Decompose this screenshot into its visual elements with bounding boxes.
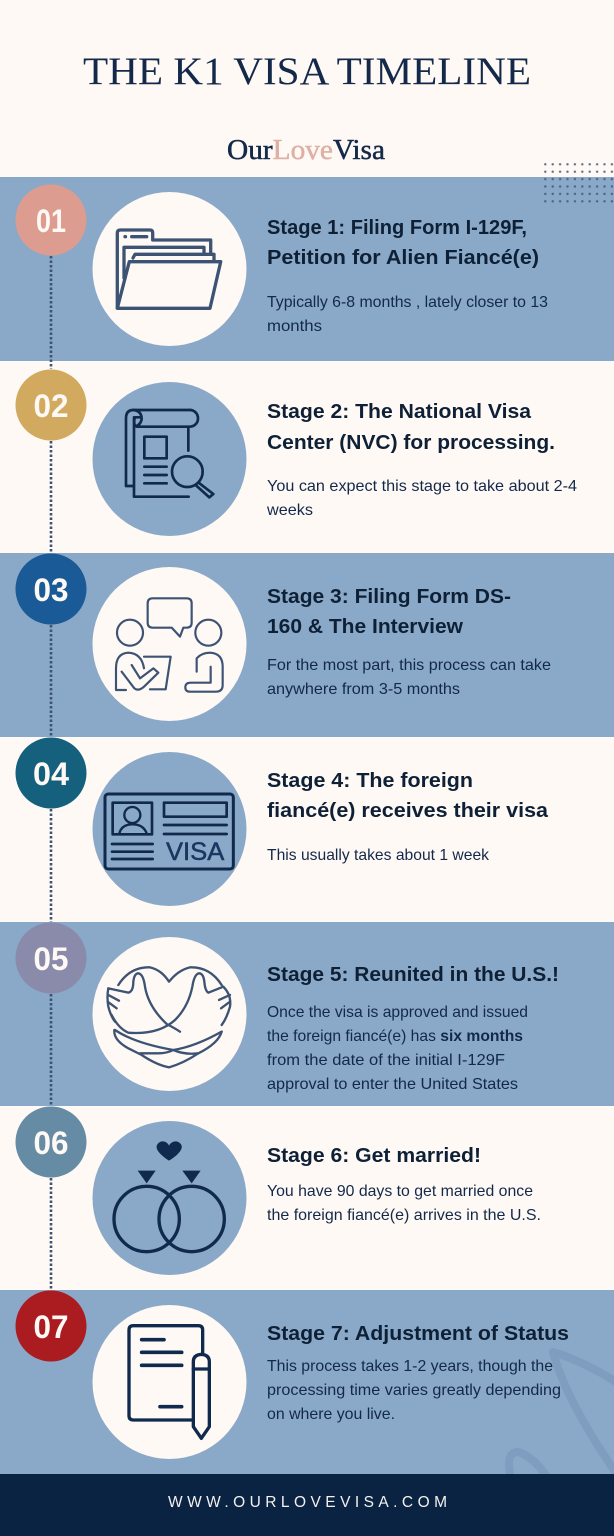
number badge 07: 07 — [34, 1309, 68, 1345]
text: stage 5 details — [267, 1004, 528, 1093]
text: stage 2 duration: weeks — [266, 502, 313, 519]
text: stage 7 details: processing time varies greatly depending — [267, 1382, 561, 1399]
text: stage 6 details — [267, 1183, 541, 1224]
heading: stage 2: Center (NVC) for processing. — [267, 431, 555, 454]
number badge 02 — [16, 370, 86, 440]
text: stage 1 duration — [267, 294, 548, 335]
heading: stage 2 — [267, 400, 555, 454]
icon: wedding rings and heart — [92, 1121, 246, 1275]
icon: hug heart — [92, 937, 246, 1091]
number badge 03 — [16, 554, 86, 624]
text: stage 5 details: approval to enter the United States — [267, 1076, 518, 1093]
icon: document with magnifier — [92, 382, 246, 536]
text: stage 3 duration — [267, 657, 551, 698]
heading: stage 4: fiancé(e) receives their visa — [267, 799, 549, 822]
panel: stage 1 — [0, 177, 614, 361]
panel: stage 5 — [0, 922, 614, 1106]
text: stage 2 duration — [266, 478, 577, 519]
text: stage 3 duration: anywhere from 3-5 months — [267, 681, 460, 698]
footer bar — [0, 1474, 614, 1536]
number badge 04: 04 — [33, 756, 69, 792]
text: stage 5 details: from the date of the initial I-129F — [267, 1052, 505, 1069]
footer: website: WWW.OURLOVEVISA.COM — [168, 1494, 447, 1511]
icon: folder — [92, 192, 246, 346]
number badge 05 — [16, 922, 86, 994]
number badge 07 — [16, 1290, 86, 1362]
number badge 05: 05 — [34, 941, 68, 977]
number badge 01: 01 — [36, 203, 66, 239]
panel: stage 6 — [16, 1106, 541, 1275]
heading: stage 1 — [267, 216, 539, 269]
number badge 06: 06 — [34, 1125, 68, 1161]
panel: stage 2 — [16, 370, 577, 536]
panel: stage 3 — [0, 553, 614, 737]
icon: document and pen — [92, 1305, 246, 1459]
heading: stage 4: Stage 4: The foreign — [267, 769, 473, 792]
text: stage 5 details: Once the visa is approved and issued — [267, 1004, 528, 1021]
text: stage 7 details: on where you live. — [267, 1406, 395, 1423]
decorative dot grid — [544, 163, 614, 207]
text: stage 6 details: You have 90 days to get married once — [267, 1183, 533, 1200]
heading: stage 3: 160 & The Interview — [267, 615, 463, 638]
heading: stage 4 — [267, 769, 549, 822]
text: stage 5 details: the foreign fiancé(e) has six months — [267, 1028, 523, 1045]
text: stage 4 duration: This usually takes about 1 week — [267, 847, 490, 864]
heading: stage 7: Stage 7: Adjustment of Status — [267, 1322, 569, 1345]
text: stage 1 duration: Typically 6-8 months , lately closer to 13 — [267, 294, 548, 311]
heading: stage 3 — [267, 585, 511, 638]
logo: OurLoveVisa: OurLoveVisa — [227, 134, 385, 166]
heading: stage 3: Stage 3: Filing Form DS- — [267, 585, 511, 608]
timeline connector: dotted lines — [50, 256, 52, 1290]
number badge 06 — [16, 1106, 86, 1178]
text: stage 6 details: the foreign fiancé(e) arrives in the U.S. — [267, 1207, 541, 1224]
heading: stage 1: Stage 1: Filing Form I-129F, — [267, 216, 527, 239]
icon: visa card: VISA — [166, 839, 225, 866]
number badge 02: 02 — [34, 388, 68, 424]
text: stage 7 details — [267, 1358, 561, 1423]
text: stage 7 details: This process takes 1-2 years, though the — [267, 1358, 553, 1375]
text: stage 1 duration: months — [267, 318, 322, 335]
panel: stage 4 — [16, 738, 549, 906]
decorative watermark scribble — [509, 1352, 614, 1474]
icon: two people talking — [92, 567, 246, 721]
heading: stage 6: Stage 6: Get married! — [267, 1144, 481, 1167]
panel: stage 7 — [0, 1290, 614, 1474]
text: stage 3 duration: For the most part, this process can take — [267, 657, 551, 674]
icon: visa card — [92, 752, 246, 906]
heading: stage 1: Petition for Alien Fiancé(e) — [267, 246, 539, 269]
number badge 04 — [16, 738, 86, 808]
number badge 03: 03 — [34, 572, 68, 608]
text: stage 2 duration: You can expect this stage to take about 2-4 — [267, 478, 577, 495]
number badge 01 — [16, 184, 86, 256]
heading: stage 5: Stage 5: Reunited in the U.S.! — [267, 963, 559, 986]
title: THE K1 VISA TIMELINE — [83, 50, 531, 93]
heading: stage 2: Stage 2: The National Visa — [267, 400, 532, 423]
